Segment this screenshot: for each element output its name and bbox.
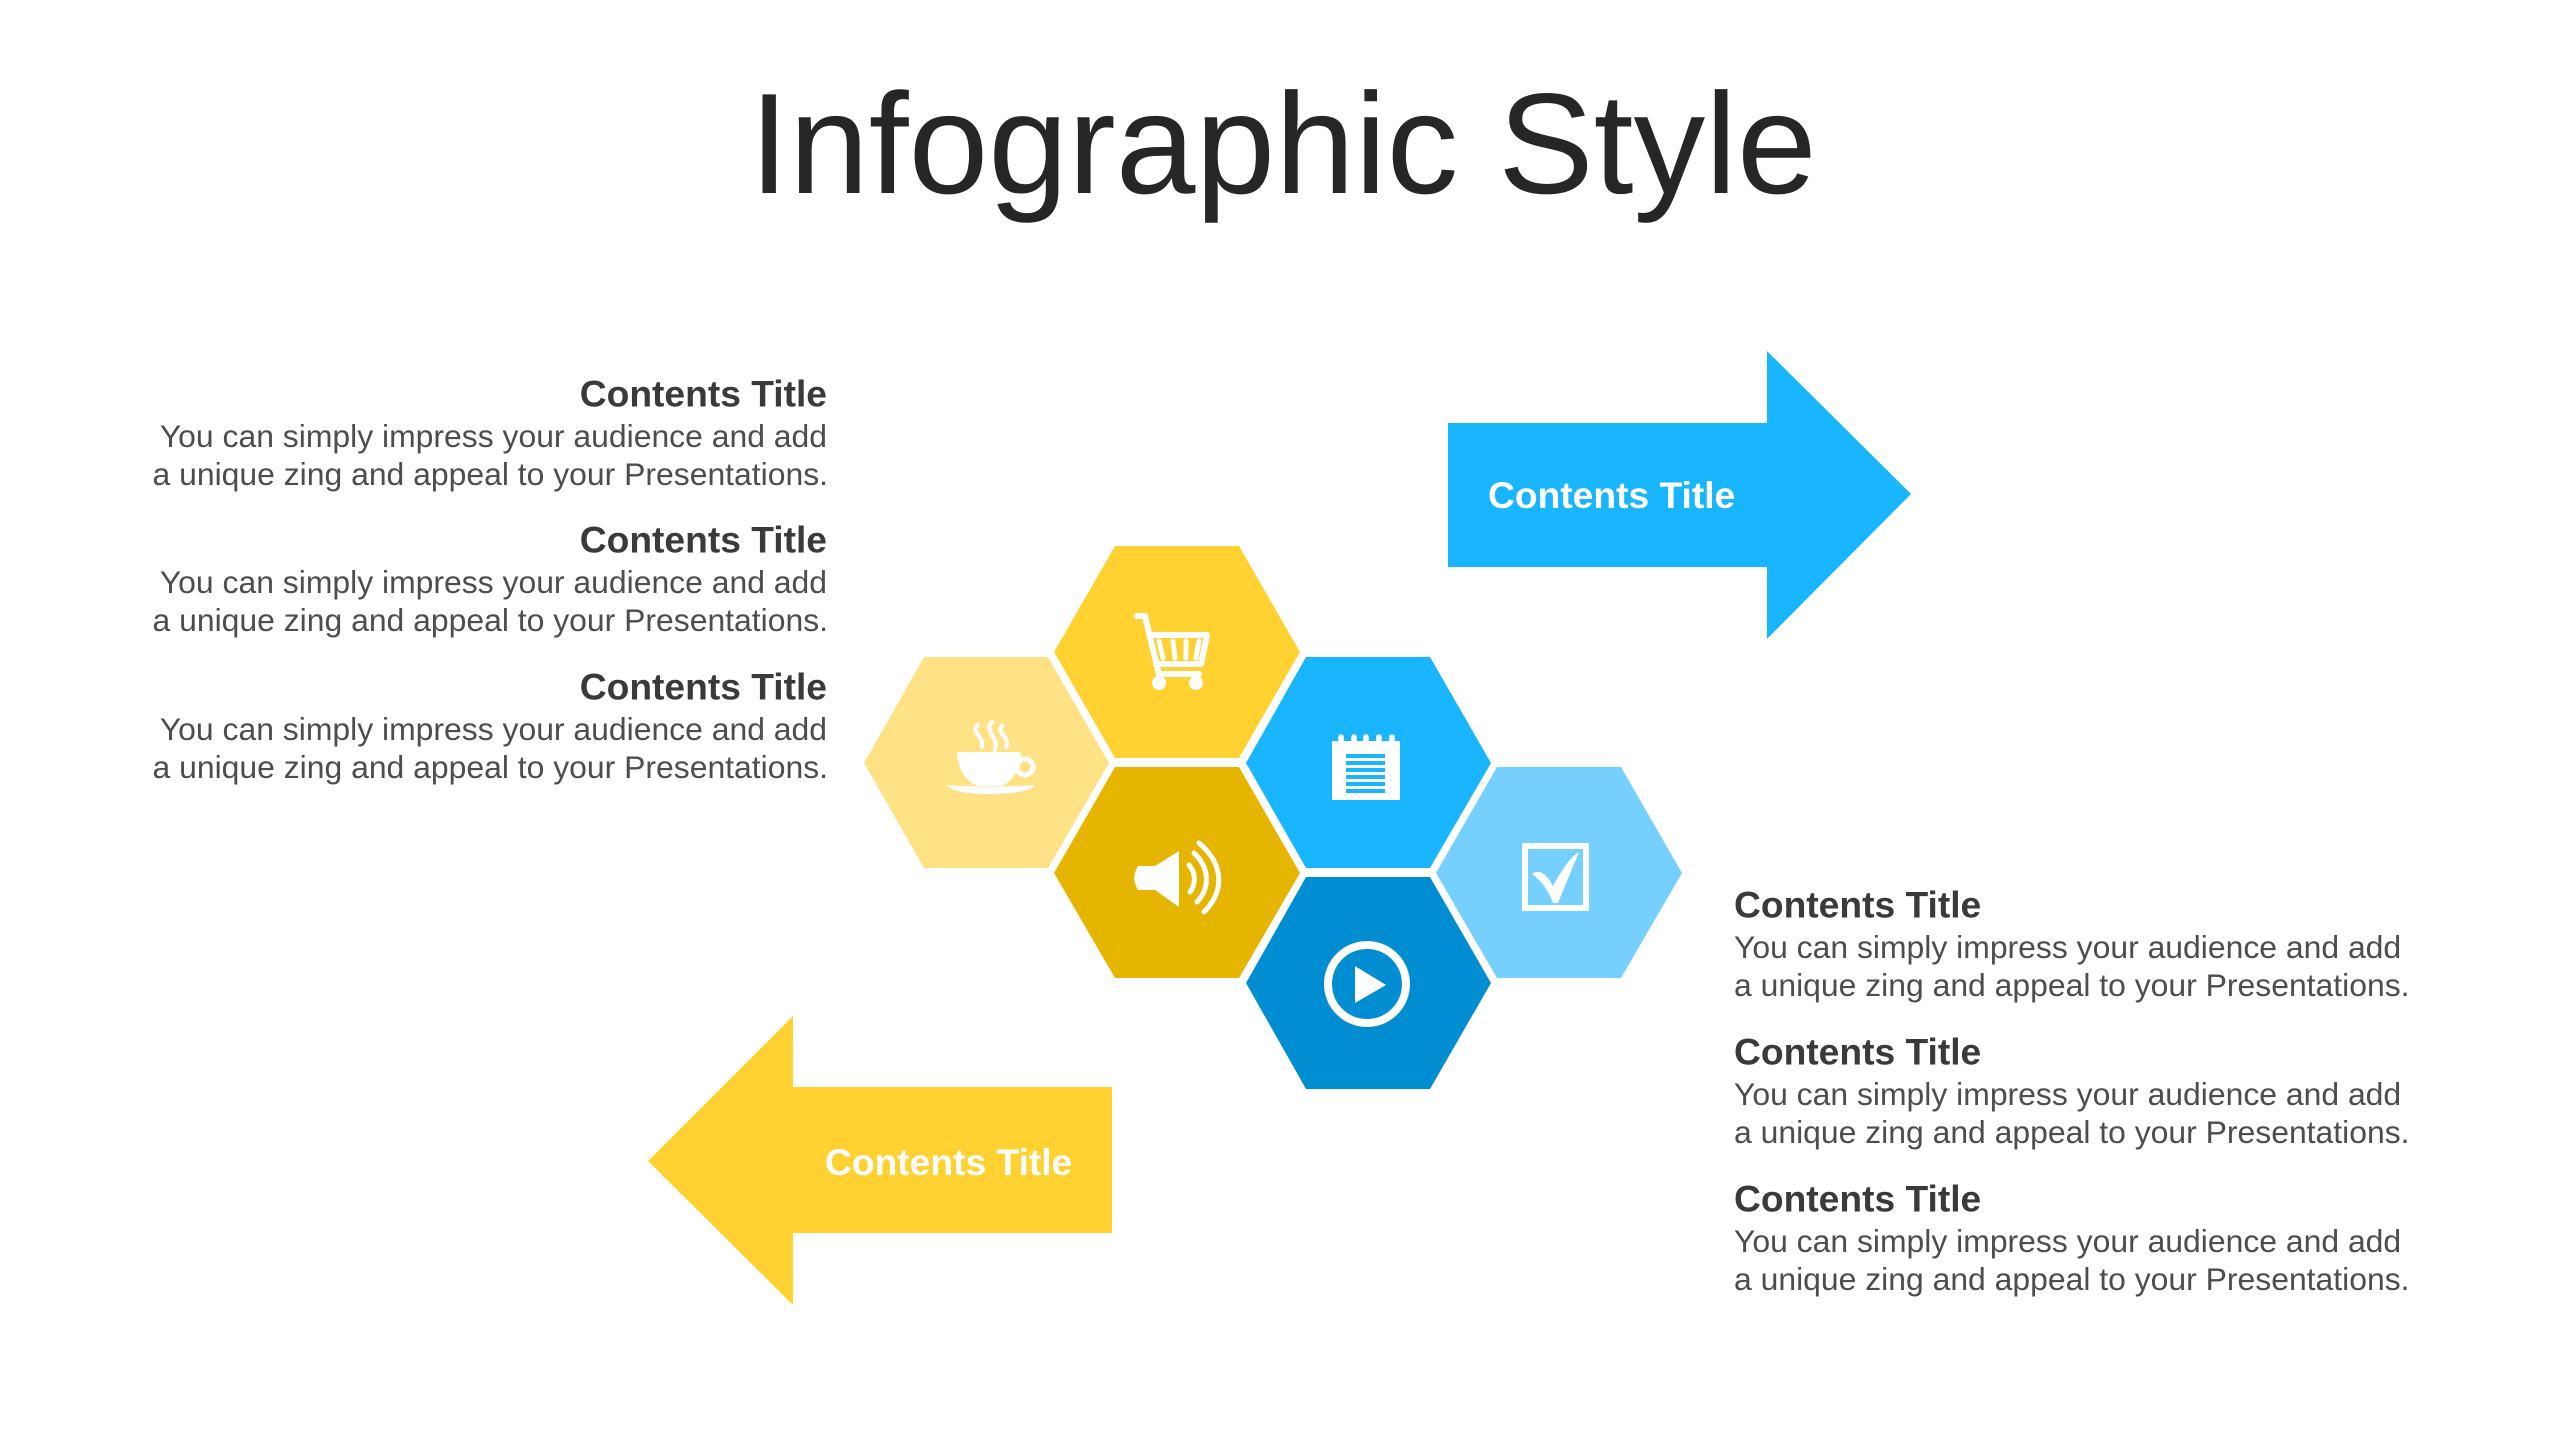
right item 2: You can simply impress your audience and add <box>1734 1076 2401 1112</box>
right item 1: You can simply impress your audience and add <box>1734 929 2401 965</box>
right item 3: Contents Title <box>1734 1178 1981 1220</box>
right item 3 <box>1734 1178 2410 1297</box>
left item 3: a unique zing and appeal to your Presentations. <box>152 749 828 785</box>
left item 2: You can simply impress your audience and add <box>160 564 827 600</box>
title: Infographic Style <box>749 64 1817 224</box>
right item 1 <box>1734 884 2410 1003</box>
icon: play button <box>1328 945 1406 1023</box>
left item 2: Contents Title <box>580 518 827 560</box>
icon: speaker <box>1134 843 1219 912</box>
left item 3 <box>152 666 828 785</box>
left item 1: Contents Title <box>580 372 827 414</box>
icon: coffee cup <box>947 722 1035 794</box>
arrow: yellow pointing left: Contents Title <box>825 1141 1072 1183</box>
icon: shopping cart <box>1137 616 1207 690</box>
left item 1: You can simply impress your audience and add <box>160 418 827 454</box>
right item 2 <box>1734 1030 2410 1150</box>
hexagon: light blue with checkbox <box>1436 767 1682 978</box>
hexagon: dark yellow with speaker <box>1054 767 1300 978</box>
right item 3: You can simply impress your audience and add <box>1734 1223 2401 1259</box>
right item 2: Contents Title <box>1734 1030 1981 1072</box>
arrow: blue pointing right <box>1448 351 1911 639</box>
arrow: yellow pointing left <box>648 1016 1112 1305</box>
left item 1: a unique zing and appeal to your Presentations. <box>152 456 828 492</box>
hexagon: yellow with shopping cart <box>1054 546 1300 758</box>
hexagon: blue with notepad <box>1246 657 1491 868</box>
text block: right column <box>1734 884 2410 1297</box>
left item 3: Contents Title <box>580 666 827 708</box>
right item 1: a unique zing and appeal to your Presentations. <box>1734 967 2410 1003</box>
right item 3: a unique zing and appeal to your Presentations. <box>1734 1261 2410 1297</box>
left item 2 <box>152 518 828 638</box>
right item 2: a unique zing and appeal to your Presentations. <box>1734 1114 2410 1150</box>
hexagon: dark blue with play button <box>1246 877 1491 1089</box>
hexagon: pale yellow with coffee cup <box>864 657 1109 868</box>
icon: notepad <box>1332 737 1400 800</box>
arrow: blue pointing right: Contents Title <box>1488 474 1735 516</box>
left item 3: You can simply impress your audience and add <box>160 711 827 747</box>
right item 1: Contents Title <box>1734 884 1981 926</box>
left item 2: a unique zing and appeal to your Presentations. <box>152 602 828 638</box>
left item 1 <box>152 372 828 492</box>
icon: checkbox <box>1525 846 1586 908</box>
text block: left column <box>152 372 828 785</box>
